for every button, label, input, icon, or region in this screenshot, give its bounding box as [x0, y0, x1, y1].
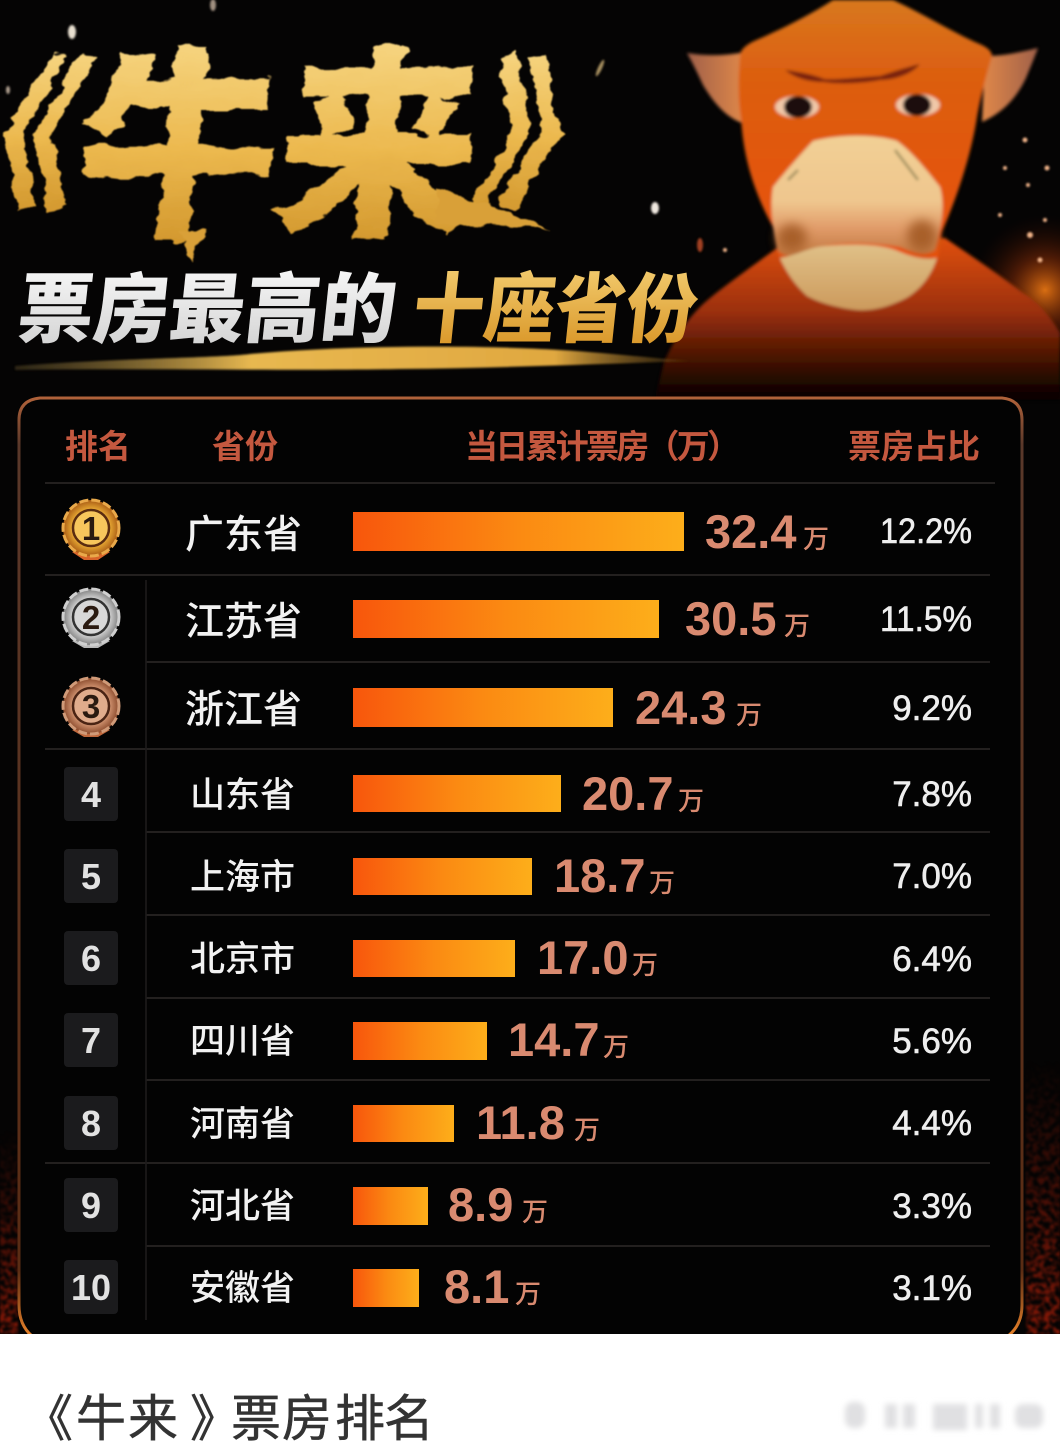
row 7: 万 — [603, 1027, 629, 1064]
row 4: 万 — [678, 781, 704, 818]
row 7 — [64, 1013, 972, 1067]
row 8: 8 — [81, 1103, 101, 1144]
cow head — [739, 0, 992, 258]
table header: 票房占比 — [848, 420, 980, 468]
row 9: 万 — [522, 1192, 548, 1229]
row 8: 河南省 — [190, 1096, 295, 1147]
row 8: 4.4% — [892, 1104, 972, 1143]
row 1: 万 — [803, 519, 829, 556]
right eye — [896, 94, 940, 116]
row 2: 30.5 — [685, 592, 776, 645]
row 9: 3.3% — [892, 1187, 972, 1226]
right ear — [982, 48, 1038, 122]
row 5: 18.7 — [554, 849, 645, 902]
fire glow: right of cow — [970, 215, 1060, 365]
subtitle — [13, 248, 704, 358]
chin — [780, 245, 937, 310]
row 3 — [63, 678, 972, 737]
watermark — [845, 1402, 1043, 1430]
title: 牛来: 》 — [456, 4, 672, 243]
row 4: 山东省 — [190, 767, 295, 818]
row 6: 北京市 — [190, 931, 295, 982]
row 1: 32.4 — [705, 505, 796, 558]
row 1: 12.2% — [880, 512, 972, 551]
row 10: 8.1 — [444, 1260, 509, 1313]
row 4: 7.8% — [892, 775, 972, 814]
row 6: 17.0 — [537, 931, 628, 984]
row 10 — [64, 1260, 972, 1314]
row 7: 14.7 — [508, 1013, 599, 1066]
cow character — [655, 0, 1060, 400]
row 3: 万 — [736, 695, 762, 732]
mouth corners — [777, 220, 937, 252]
row 4: 4 — [81, 774, 101, 815]
table header: 排名 — [65, 420, 131, 468]
row 4: 20.7 — [582, 767, 673, 820]
subtitle: 票房最高的 — [13, 248, 403, 358]
row 5: 7.0% — [892, 857, 972, 896]
table header: 当日累计票房（万） — [465, 420, 740, 468]
row 7: 四川省 — [190, 1013, 295, 1064]
row 10: 安徽省 — [190, 1260, 295, 1311]
row 5: 5 — [81, 856, 101, 897]
row 1: 广东省 — [185, 504, 302, 560]
row 8: 万 — [574, 1110, 600, 1147]
left eye — [775, 96, 819, 118]
row 8 — [64, 1096, 972, 1150]
side embers: lower edges — [0, 1060, 1060, 1334]
row 2: 2 — [82, 599, 100, 636]
row 9 — [64, 1178, 972, 1232]
row 2 — [63, 589, 972, 648]
panel: ranking table — [19, 398, 1022, 1336]
muzzle — [772, 136, 942, 255]
row 3: 24.3 — [635, 681, 726, 734]
row 6: 万 — [632, 945, 658, 982]
left ear — [687, 52, 745, 124]
row 4 — [64, 767, 972, 821]
cow body — [655, 238, 1060, 400]
subtitle: 十座省份 — [408, 248, 704, 358]
embers — [6, 0, 1050, 262]
row 3: 9.2% — [892, 689, 972, 728]
eyebrows — [785, 64, 920, 83]
row 6: 6.4% — [892, 940, 972, 979]
row 5: 上海市 — [190, 849, 295, 900]
row 9: 河北省 — [190, 1178, 295, 1229]
row 2: 万 — [784, 606, 810, 643]
row 6 — [64, 931, 972, 985]
row 10: 3.1% — [892, 1269, 972, 1308]
row 6: 6 — [81, 938, 101, 979]
row 10: 10 — [71, 1267, 111, 1308]
table header: 省份 — [212, 420, 278, 468]
brush underline — [15, 347, 690, 370]
row 7: 7 — [81, 1020, 101, 1061]
row 3: 3 — [82, 688, 100, 725]
table header — [65, 420, 980, 468]
row 3: 浙江省 — [185, 679, 302, 735]
row 2: 江苏省 — [185, 591, 302, 647]
row 5: 万 — [649, 863, 675, 900]
panel border — [19, 398, 1022, 1336]
row 10: 万 — [515, 1274, 541, 1311]
row 7: 5.6% — [892, 1022, 972, 1061]
row 1 — [63, 500, 972, 560]
row 8: 11.8 — [476, 1096, 565, 1149]
footer area — [0, 1334, 1060, 1442]
row 9: 8.9 — [448, 1178, 513, 1231]
row 2: 11.5% — [880, 600, 972, 639]
row 1: 1 — [82, 510, 100, 547]
title: 牛来 — [0, 0, 672, 282]
row 5 — [64, 849, 972, 903]
table grid — [45, 483, 995, 1320]
row 9: 9 — [81, 1185, 101, 1226]
nostril creases — [788, 150, 918, 180]
